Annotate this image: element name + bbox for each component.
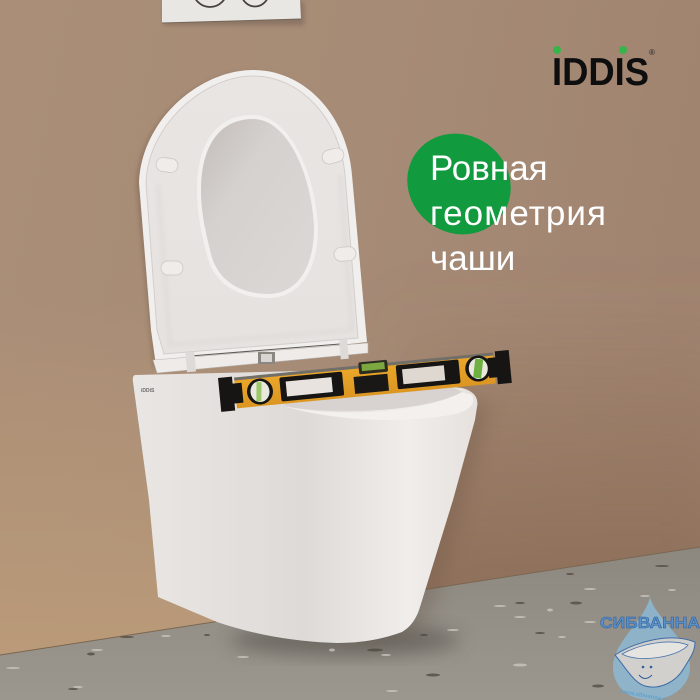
seat opening [197,115,318,298]
right vial [464,354,492,383]
window two [396,359,461,389]
green accent circle [387,113,531,255]
left vial [246,377,274,406]
iddis logo: IDDIS [552,51,649,94]
watermark name: СИБВАННА [600,615,700,632]
terrazzo floor [0,547,700,700]
toilet seat lid [136,70,368,373]
spirit level [218,348,512,412]
flush plate [162,0,304,25]
window one [279,372,344,402]
flush buttons [193,0,268,7]
central block and vial [352,360,390,394]
water drop [613,597,690,700]
bathtub [615,638,695,687]
toilet bowl [133,371,491,643]
brand mark on bowl: iDDiS [141,388,155,394]
level end caps [218,376,244,412]
headline: чаши [430,239,515,278]
bowl rim basin [283,392,473,420]
headline: Ровная [430,149,548,188]
seat bumpers [155,146,356,275]
headline: геометрия [430,194,606,233]
hinge bar [153,340,368,373]
iddis logo: ® [649,48,655,57]
watermark: sibvanna [600,597,700,700]
headline [430,149,606,278]
seat tray [146,76,358,354]
